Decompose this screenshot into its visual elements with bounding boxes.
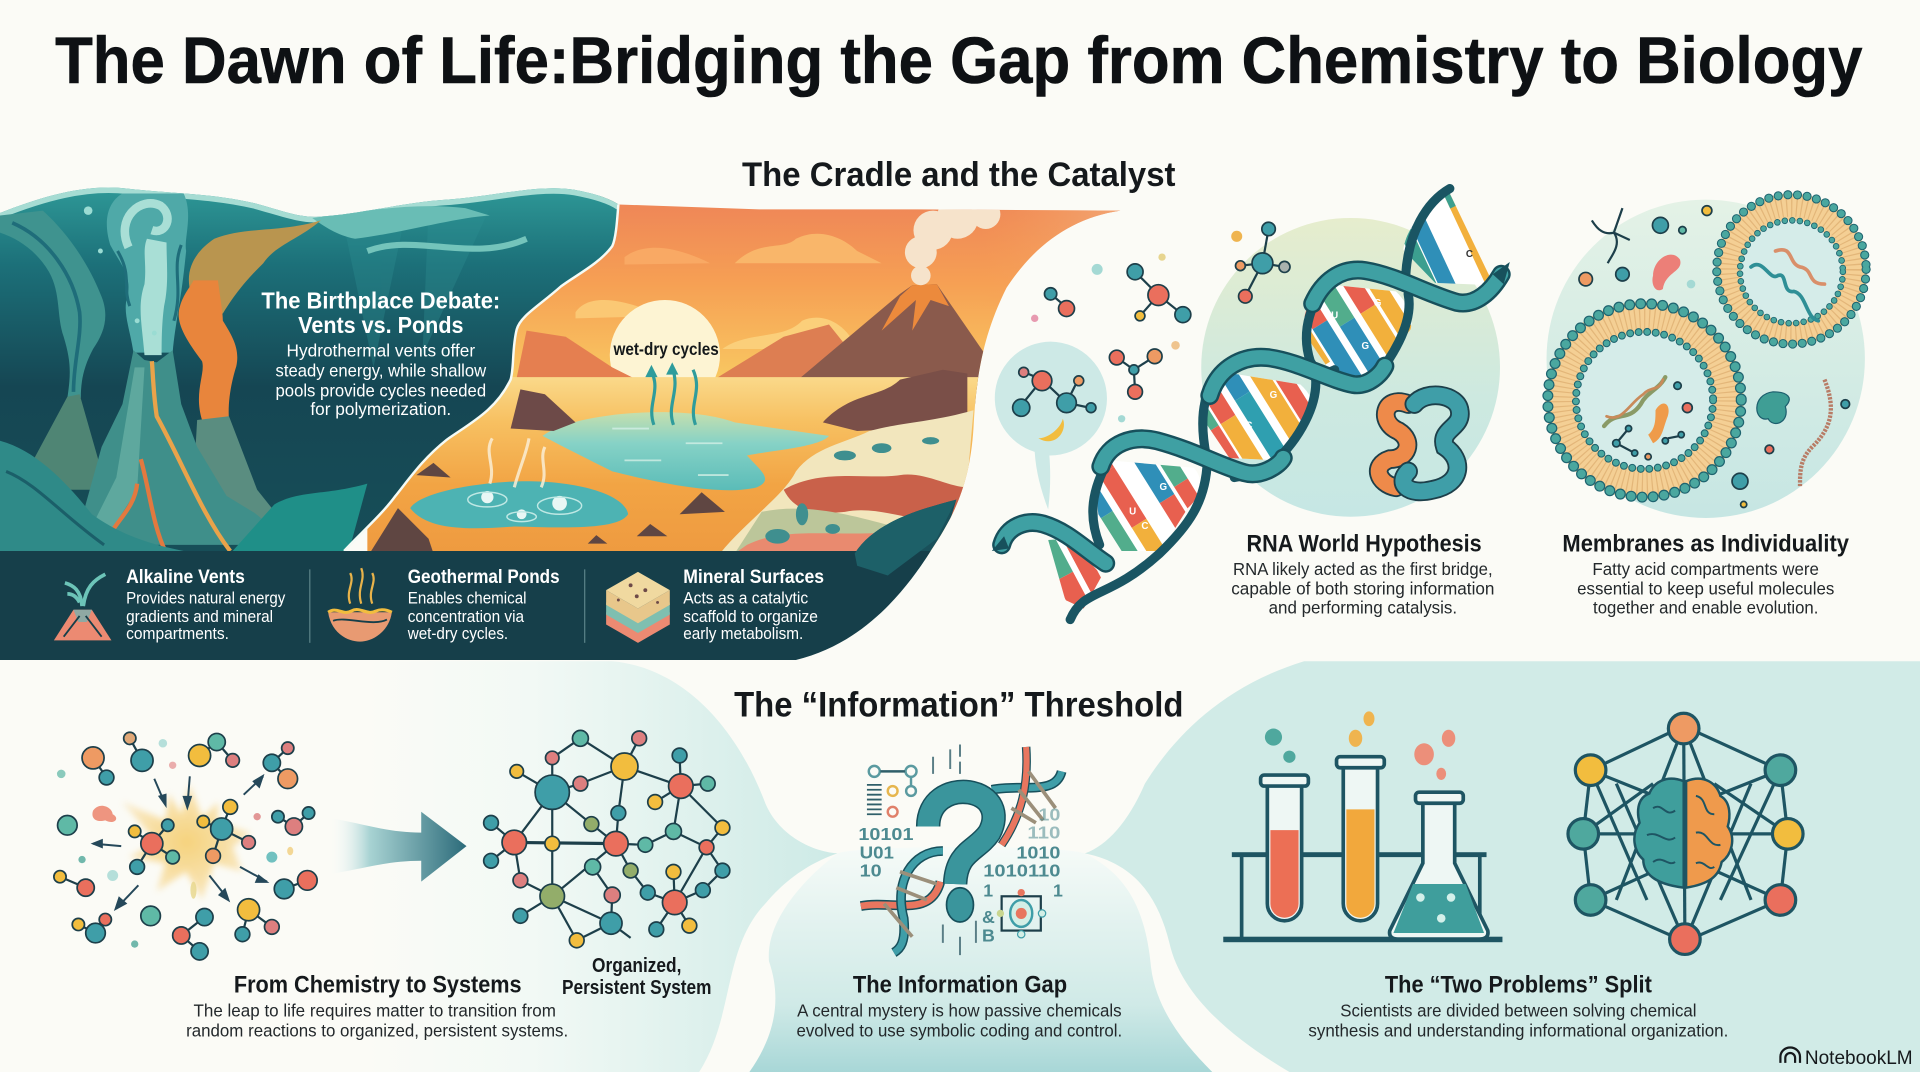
text block: The Two Problems Split (1308, 971, 1728, 1040)
item: geothermal ponds: wet-dry cycles. (407, 624, 508, 643)
atoms (54, 732, 317, 960)
text block: birthplace debate: steady energy, while shallow (276, 361, 486, 381)
binary digits: 10 (860, 861, 882, 881)
label: wet-dry cycles: wet-dry cycles (613, 339, 719, 359)
text block: RNA World Hypothesis: capable of both storing information (1231, 578, 1494, 598)
base pair stripes lobe 4: C (1466, 249, 1473, 260)
item: mineral surfaces: Mineral Surfaces (683, 566, 824, 588)
back strands (1070, 189, 1450, 620)
illustration: brain network (1568, 713, 1803, 954)
binary digits: 10101 (858, 824, 914, 844)
binary digits: 1 (983, 880, 993, 900)
text block: RNA World Hypothesis (1231, 531, 1494, 617)
base pair stripes lobe 2 (1200, 374, 1310, 460)
base pair stripes lobe 3: U (1331, 310, 1338, 321)
brain folds (1647, 796, 1720, 868)
front ribbons (1002, 270, 1501, 563)
panel: birthplace debate (0, 184, 1127, 664)
base pair stripes lobe 2: C (1245, 421, 1253, 432)
network nodes (1568, 713, 1803, 954)
base pair stripes lobe 3: G (1374, 298, 1381, 309)
text block: RNA World Hypothesis: RNA likely acted as the first bridge, (1233, 559, 1493, 579)
test tube: orange (1337, 757, 1384, 921)
left plume (0, 211, 105, 398)
icon: vent (54, 574, 111, 640)
text block: Membranes as Individuality: Membranes as Individuality (1562, 531, 1849, 558)
base pair stripes lobe 4 (1404, 194, 1490, 284)
text block: From Chemistry to Systems: From Chemistry to Systems (234, 971, 522, 998)
text block: The Information Gap: A central mystery is how passive chemicals (797, 1000, 1122, 1020)
text block: birthplace debate: pools provide cycles needed (276, 381, 486, 401)
binary digits: 110 (1027, 823, 1061, 843)
flask (1390, 792, 1488, 939)
text block: RNA World Hypothesis: RNA World Hypothesis (1247, 531, 1482, 558)
cargo inside vesicles (1604, 250, 1824, 426)
text block: Membranes as Individuality: essential to keep useful molecules (1577, 578, 1834, 598)
divider stroke between scenes (344, 204, 618, 551)
base pair stripes lobe 3 (1304, 286, 1412, 376)
arrow: chemistry to systems (328, 812, 467, 882)
lower DNA fragment (861, 851, 943, 953)
binary digits: 1010110 (983, 861, 1061, 881)
item: mineral surfaces (606, 566, 824, 643)
binary digits: & (982, 907, 995, 927)
text block: birthplace debate (261, 288, 500, 419)
label: Organized, Persistent System: Organized, (592, 955, 681, 977)
molecule bonds (60, 738, 309, 951)
bottom background: right blob (1085, 661, 1920, 1072)
vents (34, 394, 98, 490)
binary digits (858, 804, 1063, 946)
item: mineral surfaces: scaffold to organize (683, 607, 818, 626)
RNA double helix (992, 184, 1511, 624)
illustration: organized network (484, 730, 730, 948)
item: alkaline vents (54, 566, 286, 643)
strand fragment (1800, 380, 1831, 486)
text block: The Information Gap: evolved to use symbolic coding and control. (797, 1020, 1122, 1040)
binary digits: 1010 (1016, 842, 1061, 862)
brain: teal half (1634, 779, 1684, 888)
base pair stripes lobe 1: U (1129, 506, 1136, 517)
icon: mineral block (606, 572, 670, 643)
dark info bar (0, 551, 931, 660)
backdrop circle: RNA (1201, 218, 1500, 517)
label: Organized, Persistent System: Persistent System (562, 977, 711, 999)
item: geothermal ponds: Geothermal Ponds (408, 566, 560, 588)
icon: membrane vesicles (1547, 195, 1866, 518)
text block: The Information Gap (797, 971, 1122, 1040)
molecule above helix (1231, 222, 1290, 303)
motion arrows (91, 774, 269, 911)
text block: The Information Gap: The Information Gap (853, 971, 1067, 998)
text block: From Chemistry to Systems: random reactions to organized, persistent systems. (186, 1020, 568, 1040)
base pair stripes lobe 1: G (1159, 482, 1167, 493)
base pair stripes lobe 0 (1048, 540, 1101, 608)
text block: Membranes as Individuality (1562, 531, 1849, 617)
icon: speech bubble with molecule (995, 342, 1107, 509)
bottom background: left blob (367, 661, 838, 1072)
ochre and orange plume (189, 220, 321, 313)
loose particles (57, 739, 293, 948)
ground (367, 377, 1004, 557)
text block: The Two Problems Split: Scientists are divided between solving chemical (1340, 1000, 1697, 1020)
molecules floating left of helix (1031, 253, 1191, 422)
small molecules around vesicles (1579, 206, 1850, 508)
item: geothermal ponds: concentration via (408, 607, 525, 626)
wet-dry arrows (651, 367, 697, 425)
network nodes (484, 730, 730, 948)
item: alkaline vents: compartments. (126, 624, 229, 643)
illustration: random reactions burst (54, 732, 317, 960)
icon: folded protein (1379, 395, 1460, 491)
item: geothermal ponds: Enables chemical (408, 589, 527, 608)
network edges (491, 738, 722, 940)
text block: From Chemistry to Systems: The leap to life requires matter to transition from (193, 1000, 556, 1020)
network edges (1583, 726, 1788, 942)
atom box icon (997, 889, 1046, 938)
text block: birthplace debate: Hydrothermal vents offer (287, 340, 475, 360)
base pair stripes lobe 2: G (1270, 390, 1277, 401)
text block: birthplace debate: for polymerization. (310, 399, 451, 419)
binary digits: U01 (860, 842, 894, 862)
base pair stripes lobe 3: G (1362, 341, 1369, 352)
binary digits: 10 (1038, 804, 1061, 824)
rack (1223, 852, 1502, 942)
heading: The Cradle and the Catalyst: The Cradle and the Catalyst (742, 156, 1176, 194)
brain: orange half (1686, 779, 1732, 888)
ribbon tips (992, 262, 1510, 551)
binary digits: 1 (1053, 880, 1063, 900)
mineral layers (720, 410, 973, 553)
central plume (107, 193, 188, 353)
bottom background: center blob (749, 847, 1212, 1072)
text block: Membranes as Individuality: together and enable evolution. (1593, 597, 1818, 617)
lower vesicle (1548, 304, 1741, 497)
small steaming pool (410, 481, 628, 528)
question mark (928, 792, 994, 922)
pond scene (367, 196, 1127, 569)
text block: birthplace debate: Vents vs. Ponds (298, 312, 463, 338)
base pair stripes lobe 1: C (1141, 521, 1148, 532)
icon: steaming bowl (328, 568, 392, 642)
label: Organized, Persistent System (562, 955, 711, 999)
binary digits: B (982, 926, 995, 946)
logo: NotebookLM: NotebookLM (1805, 1048, 1913, 1069)
item: alkaline vents: gradients and mineral (126, 607, 273, 626)
rocks (511, 389, 576, 431)
text block: From Chemistry to Systems (186, 971, 568, 1040)
base pair stripes lobe 1 (1098, 461, 1200, 551)
small glyph icons (867, 744, 976, 955)
upper DNA fragment (992, 747, 1062, 845)
illustration: information gap (858, 744, 1063, 955)
text block: Membranes as Individuality: Fatty acid compartments were (1592, 559, 1819, 579)
illustration: test tubes and flask (1223, 711, 1502, 942)
item: mineral surfaces: early metabolism. (683, 624, 803, 643)
heading: The Information Threshold: The “Information” Threshold (734, 684, 1183, 724)
test tube: red (1261, 775, 1308, 921)
rising bubbles (1265, 711, 1455, 780)
text block: The Two Problems Split: synthesis and understanding informational organization. (1308, 1020, 1728, 1040)
text block: The Two Problems Split: The “Two Problems” Split (1385, 971, 1652, 998)
item: alkaline vents: Provides natural energy (126, 589, 286, 608)
backdrop circle: membranes (1547, 200, 1865, 518)
vents scene (0, 184, 637, 553)
base pair stripes lobe 4: A (1438, 210, 1445, 221)
item: alkaline vents: Alkaline Vents (126, 566, 245, 588)
item: geothermal ponds (328, 566, 560, 643)
upper vesicle (1717, 195, 1866, 344)
item: mineral surfaces: Acts as a catalytic (683, 589, 808, 608)
starburst (122, 784, 251, 900)
text block: birthplace debate: The Birthplace Debate: (261, 288, 500, 314)
text block: RNA World Hypothesis: and performing catalysis. (1269, 597, 1457, 617)
